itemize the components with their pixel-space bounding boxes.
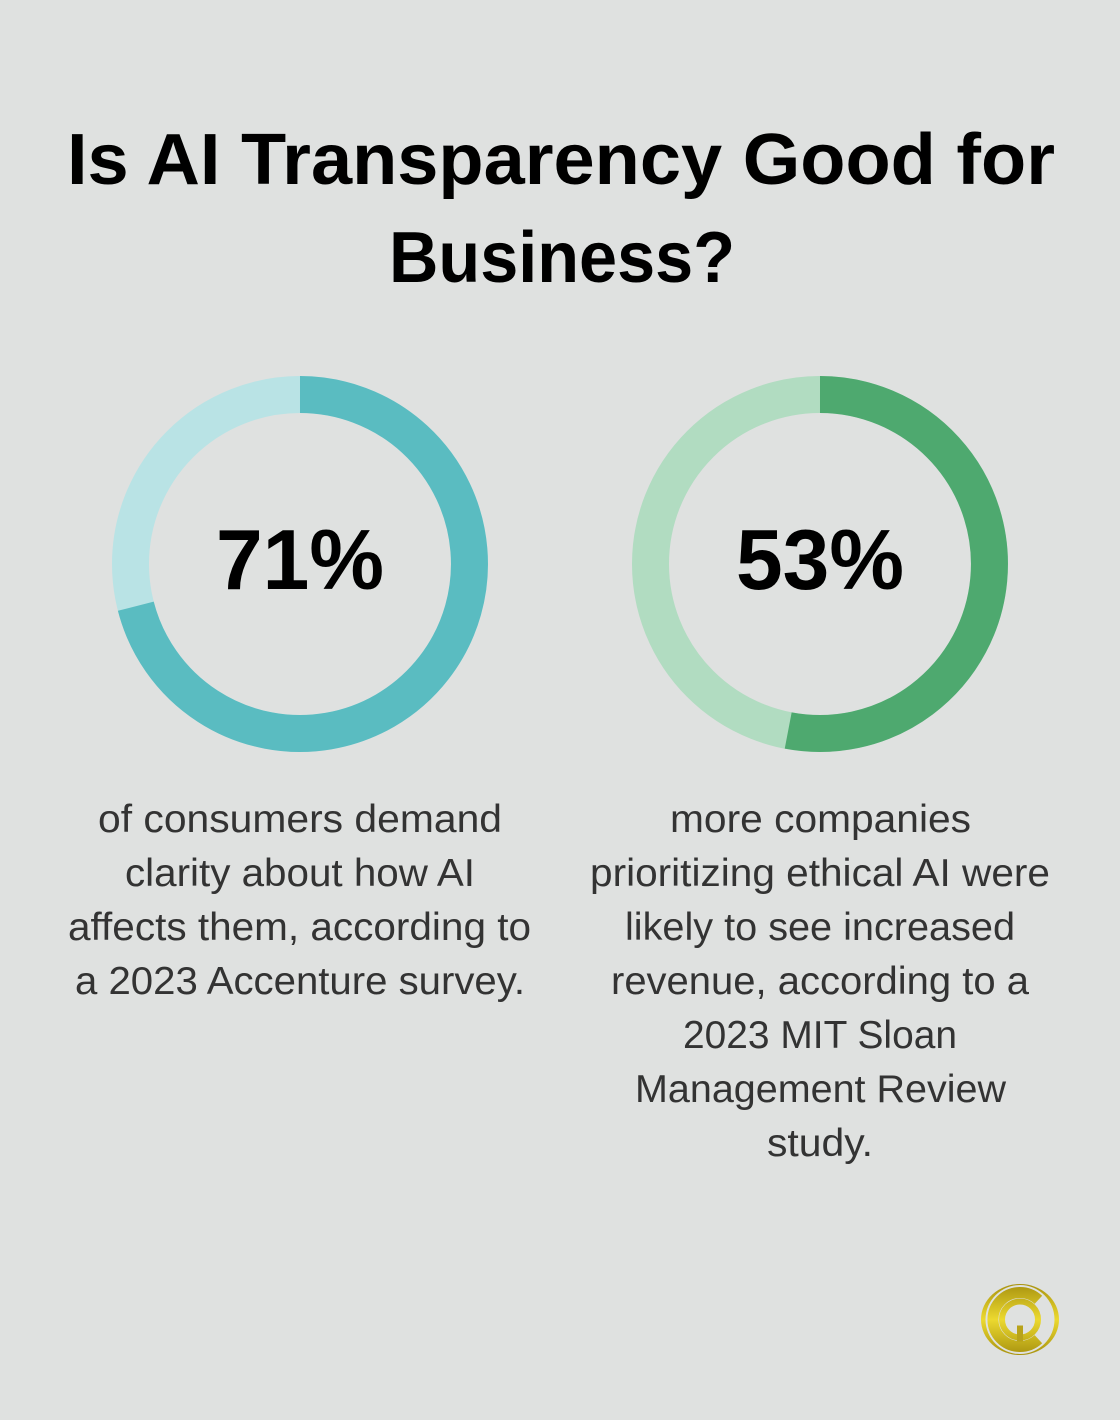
title: Business? (389, 218, 735, 298)
description: companies: prioritizing ethical AI were (590, 852, 1050, 895)
value: 53%: 53% (736, 513, 904, 608)
description: companies: more companies (670, 798, 971, 841)
icon: gold logo (981, 1284, 1059, 1355)
description: consumers: affects them, according to (68, 906, 531, 949)
value: 71%: 71% (216, 513, 384, 608)
panel: 53% statistic (590, 394, 1050, 1165)
donut chart: 53% (650, 394, 990, 734)
title (67, 120, 1055, 298)
description: companies (590, 798, 1050, 1165)
description: consumers: a 2023 Accenture survey. (75, 960, 525, 1003)
description: consumers: clarity about how AI (125, 852, 475, 895)
description: consumers (68, 798, 531, 1003)
description: companies: 2023 MIT Sloan (683, 1014, 957, 1057)
description: consumers: of consumers demand (98, 798, 502, 841)
description: companies: revenue, according to a (611, 960, 1029, 1003)
title: Is AI Transparency Good for (67, 120, 1055, 200)
description: companies: Management Review (635, 1068, 1007, 1111)
panel: 71% statistic (68, 394, 531, 1003)
description: companies: likely to see increased (625, 906, 1015, 949)
description: companies: study. (767, 1122, 873, 1165)
donut chart: 71% (130, 394, 470, 734)
